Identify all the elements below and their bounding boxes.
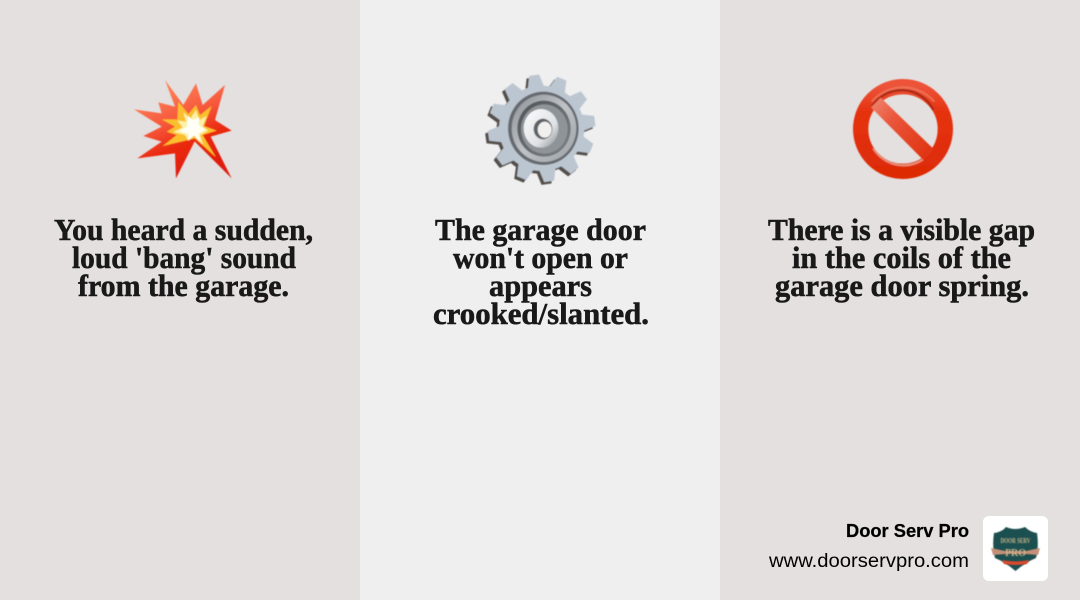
- logo text: DOOR SERV: [1000, 537, 1030, 545]
- icon: explosion: [134, 80, 232, 178]
- text: middle panel heading: crooked/slanted.: [433, 296, 649, 331]
- text: right panel heading: garage door spring.: [775, 268, 1029, 303]
- text: left panel heading: loud 'bang' sound: [72, 240, 296, 275]
- text: left panel heading: You heard a sudden,: [54, 212, 313, 247]
- brand name: Door Serv Pro: [846, 521, 969, 541]
- inner rim light: [873, 148, 923, 165]
- text: middle panel heading: appears: [489, 268, 592, 303]
- logo tile: [983, 516, 1048, 581]
- gear dish: [508, 92, 579, 165]
- icon: prohibited sign: [861, 87, 945, 171]
- diagonal bar: [871, 98, 934, 160]
- logo shield: [993, 527, 1038, 571]
- text: middle panel heading: The garage door: [435, 212, 646, 247]
- panel: left background: [0, 0, 360, 600]
- gear shadow: [478, 70, 600, 192]
- text: left panel heading: [54, 212, 313, 303]
- ring: [861, 87, 945, 171]
- website url: www.doorservpro.com: [768, 551, 969, 572]
- text: right panel heading: [768, 212, 1035, 303]
- text: left panel heading: from the garage.: [78, 268, 289, 303]
- logo tile: PRO: [1005, 548, 1026, 559]
- gear body: [481, 68, 602, 189]
- panel: right background: [720, 0, 1080, 600]
- logo ribbon: [991, 548, 1040, 555]
- inner rim shadow: [872, 90, 933, 110]
- gear hub: [524, 109, 558, 148]
- ring top highlight: [872, 87, 934, 102]
- text: right panel heading: There is a visible gap: [768, 212, 1035, 247]
- logo red band: [1002, 560, 1029, 565]
- text: middle panel heading: [433, 212, 649, 331]
- panel: middle background: [360, 0, 720, 600]
- text: middle panel heading: won't open or: [453, 240, 628, 275]
- icon: gear: [478, 68, 602, 192]
- text: right panel heading: in the coils of the: [792, 240, 1011, 275]
